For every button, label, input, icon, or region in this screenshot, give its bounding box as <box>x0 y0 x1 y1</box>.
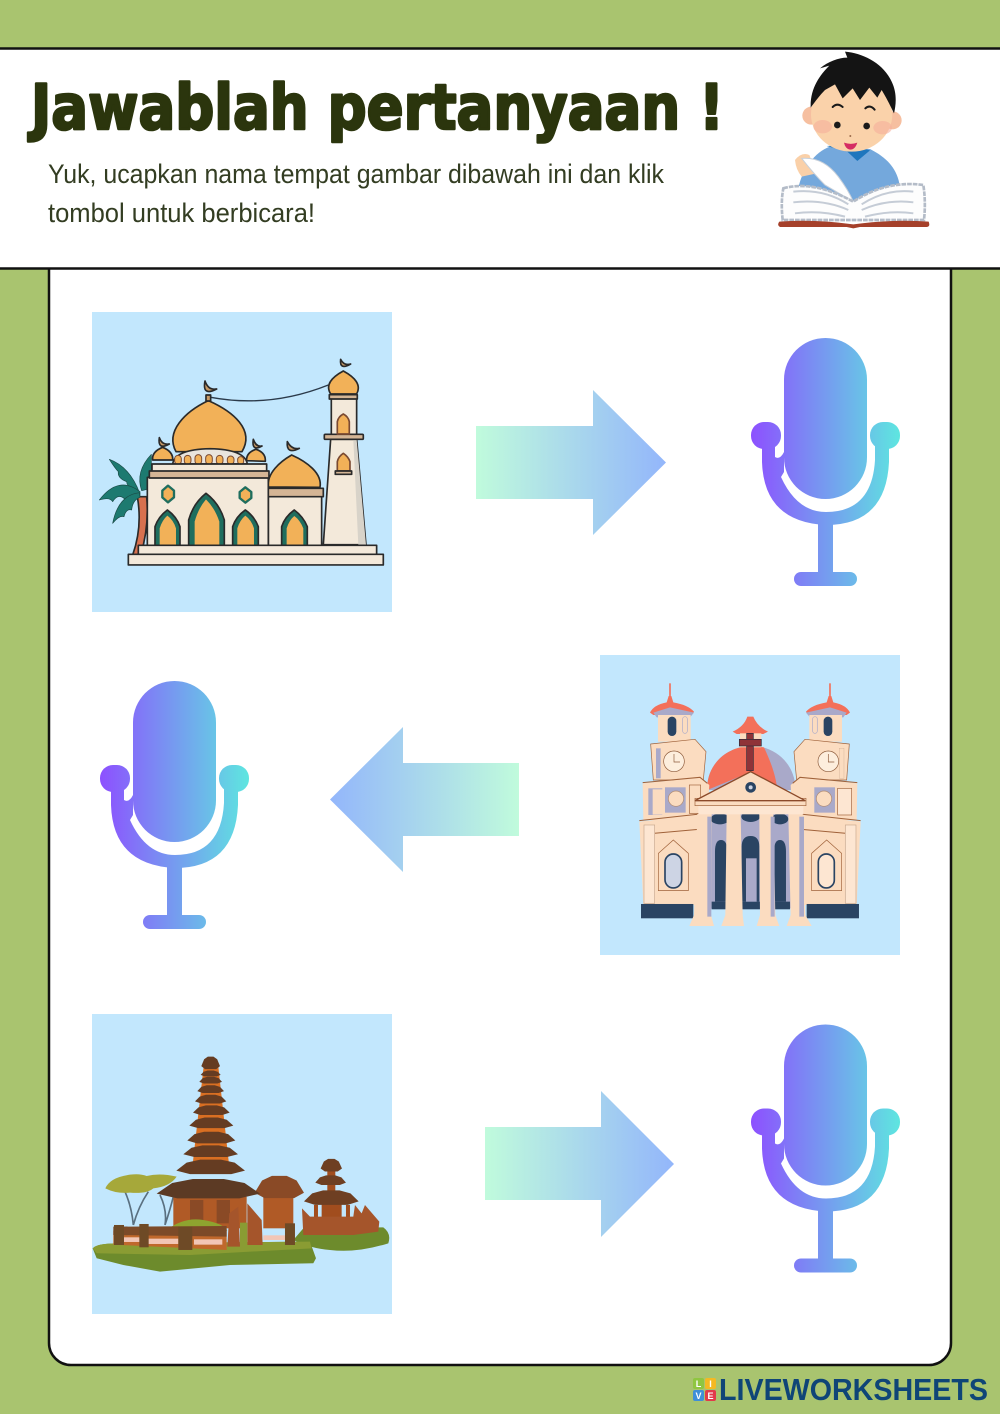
logo tiles: E <box>707 1391 714 1401</box>
image panel: church <box>600 655 900 955</box>
main white panel <box>49 230 951 1365</box>
header band <box>0 48 1000 268</box>
book cover <box>778 221 929 228</box>
logo tiles: L <box>696 1379 702 1389</box>
trees <box>125 1192 173 1225</box>
crescents <box>159 381 262 448</box>
portico interior <box>705 813 795 908</box>
instruction text: Yuk, ucapkan nama tempat gambar dibawah ini dan klik <box>48 159 664 189</box>
image panel: Balinese temple <box>92 1014 392 1314</box>
pediment <box>698 805 803 814</box>
logo tiles: I <box>709 1379 712 1389</box>
title: Jawablah pertanyaan ! <box>27 71 724 144</box>
diamond windows <box>162 486 174 502</box>
left island <box>93 1242 316 1272</box>
icon: boy reading a book <box>778 52 929 228</box>
image panel: mosque <box>92 312 392 612</box>
main dome <box>173 401 246 452</box>
minaret <box>323 439 366 545</box>
small pagoda <box>314 1168 350 1227</box>
boy ears <box>802 107 902 129</box>
gate pillars <box>114 1223 295 1250</box>
small pavilion <box>263 1197 293 1228</box>
microphone 3 <box>751 1024 900 1272</box>
boy face <box>811 77 892 152</box>
right tower <box>791 683 861 918</box>
main hall <box>147 477 268 545</box>
right island <box>293 1227 389 1251</box>
church illustration <box>639 683 861 926</box>
arrow: right, mosque to microphone <box>476 390 666 535</box>
boy hair <box>811 52 896 113</box>
logo tiles: V <box>695 1391 702 1401</box>
instruction text <box>48 159 664 228</box>
Liveworksheets logo <box>693 1372 988 1407</box>
temple illustration <box>93 1057 389 1272</box>
cupola <box>733 717 768 734</box>
small domes <box>153 447 173 460</box>
string of lights <box>211 385 328 401</box>
open book <box>782 184 925 220</box>
columns <box>689 814 812 926</box>
church dome <box>707 746 795 790</box>
mosque background <box>92 312 392 612</box>
right wall <box>302 1205 379 1235</box>
boy hand and page <box>795 154 817 177</box>
icon: microphone 1 <box>751 338 900 586</box>
meru hall <box>173 1197 247 1228</box>
drum with small arches <box>173 449 247 464</box>
side hall <box>268 496 322 545</box>
left tower <box>639 683 709 918</box>
arrow: right, temple to microphone <box>485 1091 674 1237</box>
temple background <box>92 1014 392 1314</box>
mosque steps <box>138 545 377 555</box>
instruction text: tombol untuk berbicara! <box>48 198 315 228</box>
temple shrub <box>166 1219 227 1231</box>
palm tree <box>133 497 147 555</box>
main hall doors <box>189 493 224 545</box>
side hall door <box>282 510 307 545</box>
logo tiles <box>693 1378 716 1401</box>
arrow: left, church to microphone <box>330 727 519 872</box>
microphone 2 <box>100 681 249 929</box>
temple walls <box>113 1229 227 1250</box>
boy shirt <box>798 147 899 208</box>
boy eyes, brows and mouth <box>834 122 870 129</box>
main meru tower <box>192 1063 230 1173</box>
mosque illustration <box>99 359 383 565</box>
split gate <box>227 1207 240 1247</box>
church background <box>600 655 900 955</box>
cross <box>739 733 761 771</box>
